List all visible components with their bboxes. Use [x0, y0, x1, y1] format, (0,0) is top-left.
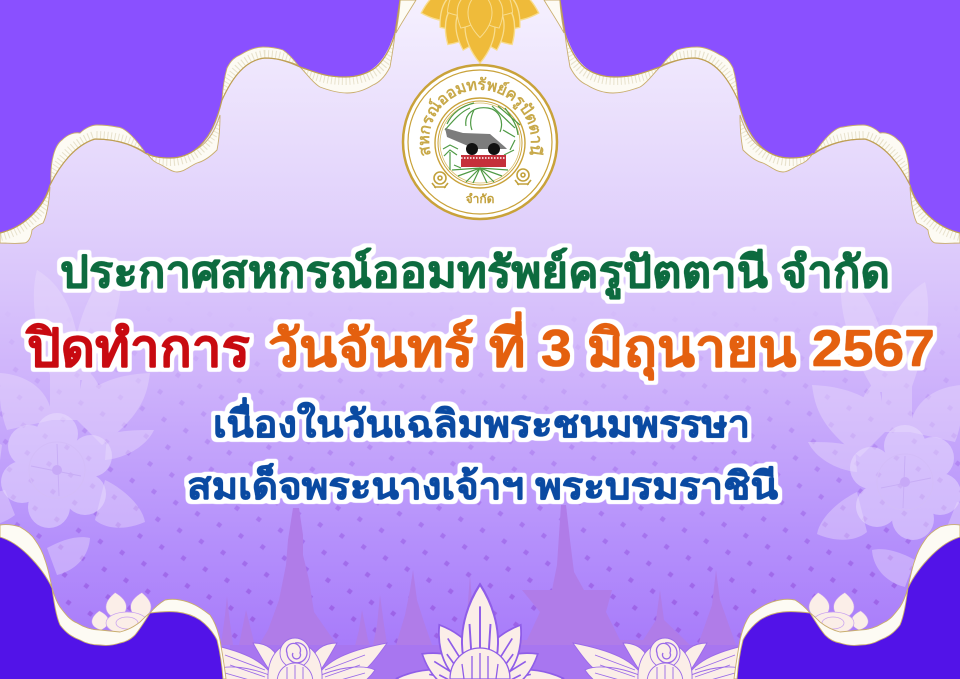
logo ring text: สหกรณ์ออมทรัพย์ครูปัตตานี — [419, 76, 544, 156]
reason line 1: เนื่องในวันเฉลิมพระชนมพรรษา — [213, 397, 750, 446]
faded lotus left — [0, 260, 154, 575]
temple silhouette left — [221, 508, 478, 679]
small flower bottom left — [91, 592, 152, 634]
ground band — [230, 645, 740, 679]
peony flower right — [573, 638, 757, 679]
lotus flower bottom centre — [395, 584, 565, 679]
reason line 2: สมเด็จพระนางเจ้าฯ พระบรมราชินี — [187, 463, 778, 508]
heading line 1: ประกาศสหกรณ์ออมทรัพย์ครูปัตตานี จำกัด — [60, 247, 890, 299]
bottom left corner curtain — [0, 525, 226, 679]
temple silhouette right — [490, 505, 736, 679]
top right corner curtain — [544, 0, 960, 243]
faded lotus right — [808, 272, 960, 587]
logo: cooperative seal — [402, 64, 558, 220]
logo bottom text: จำกัด — [466, 192, 495, 206]
bottom right corner curtain — [734, 525, 960, 679]
closure line: orange date part: วันจันทร์ ที่ 3 มิถุนายน 2567 — [268, 312, 935, 381]
closure line: red part: ปิดทำการ — [25, 320, 250, 378]
logo mountain and palm — [443, 103, 520, 183]
logo cannon — [445, 128, 507, 149]
dotted pattern — [0, 340, 960, 644]
small flower bottom right — [808, 592, 869, 634]
top left corner curtain — [0, 0, 416, 243]
gold flower top centre — [416, 0, 544, 63]
logo emblems — [432, 169, 531, 188]
peony flower left — [203, 638, 387, 679]
